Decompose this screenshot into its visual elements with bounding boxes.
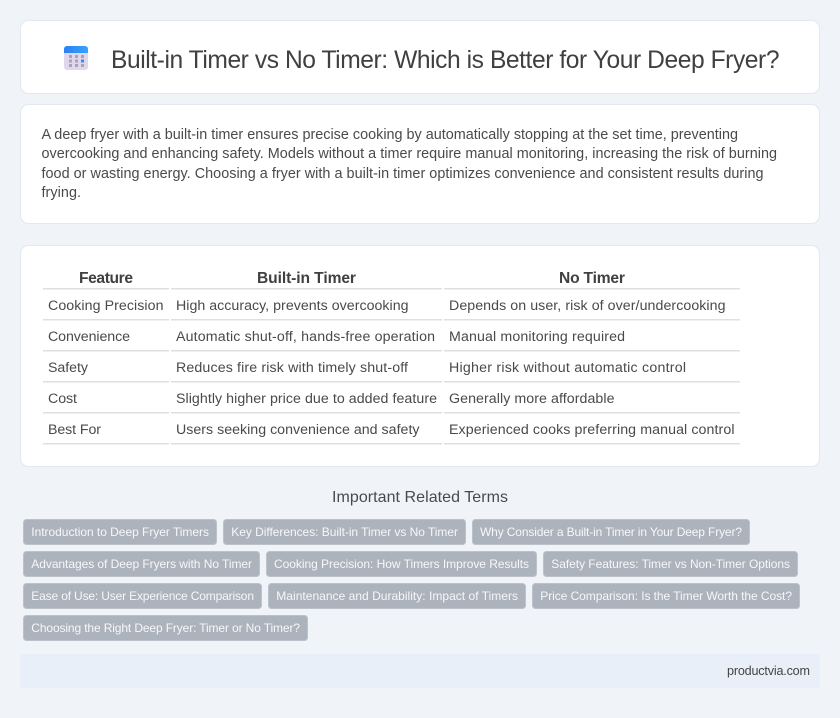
summary paragraph: A deep fryer with a built-in timer ensures precise cooking by automatically stopping at the set time, preventing [42,127,738,143]
icon: calendar [64,46,88,70]
tag [268,584,526,608]
row: cost [48,391,615,407]
tag [24,616,308,640]
tag [544,552,798,576]
tag: Ease of Use: User Experience Comparison [31,589,254,603]
tag [224,520,466,544]
tag [24,520,216,544]
table header: No Timer [559,270,625,287]
tag [532,584,800,608]
tag [472,520,750,544]
row: safety: Safety [48,360,89,376]
row: convenience: Automatic shut-off, hands-free operation [176,329,435,345]
tag: Introduction to Deep Fryer Timers [31,525,209,539]
heading: important related terms: Important Related Terms [332,489,508,506]
table header: Feature [79,270,133,287]
table header: Built-in Timer [257,270,356,287]
row: cooking precision [48,298,726,314]
tag: Price Comparison: Is the Timer Worth the Cost? [540,589,792,603]
row: convenience: Manual monitoring required [449,329,625,345]
panel: summary card [20,104,820,224]
panel: title card [20,20,820,94]
tag: Why Consider a Built-in Timer in Your Deep Fryer? [480,525,742,539]
row: convenience [48,329,625,345]
row: safety [48,360,686,376]
row: cost: Generally more affordable [449,391,615,407]
footer source: productvia.com [727,664,810,678]
tag: Maintenance and Durability: Impact of Timers [276,589,518,603]
tag [24,584,262,608]
table header [79,270,625,287]
row: safety: Reduces fire risk with timely shut-off [176,360,408,376]
table rules [43,288,740,444]
row: best for: Experienced cooks preferring manual control [449,422,734,438]
row: cost: Cost [48,391,77,407]
tag: Choosing the Right Deep Fryer: Timer or No Timer? [31,621,300,635]
row: cooking precision: Cooking Precision [48,298,164,314]
row: safety: Higher risk without automatic control [449,360,686,376]
row: best for: Users seeking convenience and safety [176,422,420,438]
tag: Safety Features: Timer vs Non-Timer Options [551,557,790,571]
summary paragraph: food or wasting energy. Choosing a fryer with a built-in timer optimizes convenience and consistent results during [42,166,764,182]
row: best for [48,422,734,438]
row: cost: Slightly higher price due to added feature [176,391,437,407]
row: cooking precision: Depends on user, risk of over/undercooking [449,298,726,314]
title: Built-in Timer vs No Timer: Which is Better for Your Deep Fryer? [111,47,780,74]
footer bar [20,654,820,688]
panel: comparison table card [20,246,820,466]
row: best for: Best For [48,422,101,438]
summary paragraph: overcooking and enhancing safety. Models without a timer require manual monitoring, increasing the risk of burning [42,146,777,162]
tag: Key Differences: Built-in Timer vs No Timer [231,525,458,539]
tag [24,552,260,576]
row: cooking precision: High accuracy, prevents overcooking [176,298,408,314]
tag: Cooking Precision: How Timers Improve Results [274,557,529,571]
related term tags [24,520,800,640]
tag: Advantages of Deep Fryers with No Timer [31,557,252,571]
row: convenience: Convenience [48,329,130,345]
tag [266,552,536,576]
summary paragraph: frying. [42,185,81,201]
